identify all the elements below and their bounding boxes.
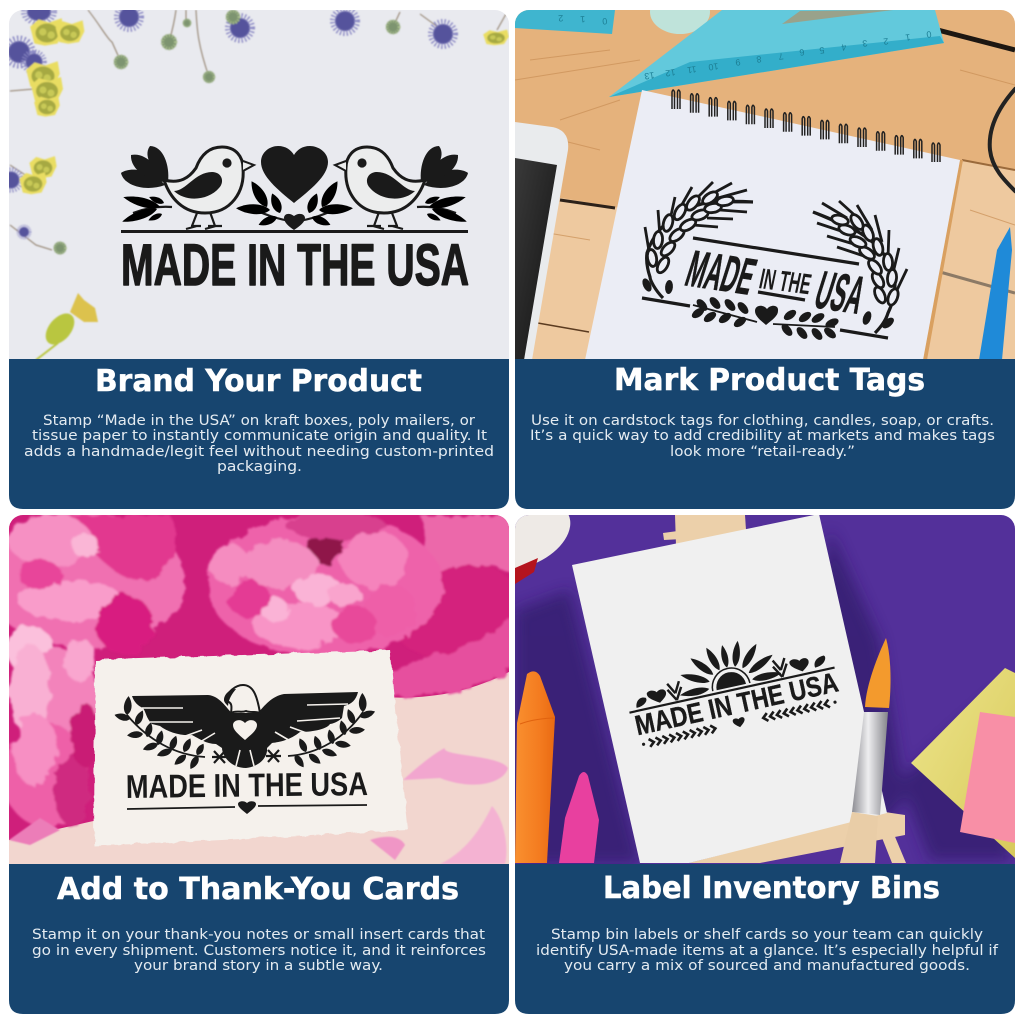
peony blooms [0,511,525,827]
small ruler: 2 [558,13,564,23]
icon: eagle [132,685,358,768]
paintbrush [840,638,891,863]
dried flowers [1,1,509,360]
icon: heart and laurel [690,295,840,342]
stamp text: MADE IN THE USA [632,666,841,741]
icon: right bird [297,146,468,229]
body text: look more “retail-ready.” [670,444,855,460]
triangle ruler: 10 [708,61,719,72]
heading: Mark Product Tags [614,363,925,398]
stamp: eagle [114,685,376,814]
body text: your brand story in a subtle way. [134,958,383,974]
small ruler: 0 [602,16,608,26]
glasses [990,88,1016,192]
caption band [515,864,1015,1014]
triangle ruler: 6 [799,47,805,58]
icons: left ornaments [633,681,684,709]
sponge [911,668,1015,858]
panel: Label Inventory Bins [469,488,1015,1014]
rules and heart [127,801,367,814]
loose petals [9,748,508,864]
triangle ruler: 1 [905,32,911,43]
heading: Add to Thank-You Cards [57,872,459,907]
triangle ruler: 12 [665,67,676,78]
icon: right laurel [288,693,376,769]
triangle ruler: 13 [644,70,655,81]
stamp text: MADE IN THE USA [121,233,469,298]
triangle ruler: 8 [756,54,762,65]
small ruler: 1 [580,14,586,24]
triangle ruler: 7 [778,51,784,62]
body text: Stamp “Made in the USA” on kraft boxes, poly mailers, or [43,413,475,429]
stamp: birds and heart [121,146,469,298]
protractor [650,10,710,34]
body text: packaging. [217,459,302,475]
triangle ruler: 2 [883,36,889,47]
caption band [9,864,509,1014]
plank gaps [515,10,1015,332]
body text: adds a handmade/legit feel without needing custom-printed [24,444,494,460]
white object and red accent [469,488,581,584]
spiral binding [672,90,940,162]
icon: left laurel [114,696,206,771]
body text: tissue paper to instantly communicate origin and quality. It [32,428,488,444]
lighter planks [515,160,1015,360]
purple background [515,515,1015,865]
stamp: wheat wreath: USA [808,260,872,325]
body text: Stamp bin labels or shelf cards so your team can quickly [551,927,983,943]
triangle ruler: 11 [686,64,697,75]
triangle ruler: 5 [819,45,825,56]
icon: small heart [284,214,305,230]
body text: go in every shipment. Customers notice it, and it reinforces [32,943,486,959]
paper background [9,10,509,360]
caption band [9,359,509,509]
triangle ruler: 4 [841,42,847,53]
body text: Use it on cardstock tags for clothing, candles, soap, or crafts. [531,413,994,429]
stamp: wheat wreath [641,182,907,342]
canvas [572,514,887,863]
photo: stamped paper with dried flowers [1,1,509,360]
triangle ruler: 3 [862,38,868,49]
body text [530,413,995,460]
pen [979,227,1012,360]
photo: notebook on wood desk [515,0,1016,360]
handmade paper card [94,650,408,846]
icons: right ornaments [772,649,827,678]
icon: left wheat [641,182,753,298]
caption band [515,359,1015,509]
stamp text: MADE IN THE USA [126,765,368,805]
shadows [515,530,1010,863]
panel: Add to Thank-You Cards [0,511,525,1014]
icon: right wheat [813,201,907,333]
orange crayon [515,671,555,863]
icon: chevron sprigs and heart [641,697,837,749]
body text [32,927,486,974]
body text [536,927,999,974]
body text: you carry a mix of sourced and manufactured goods. [564,958,970,974]
stamp text: in the: IN THE [757,263,814,301]
photo: handmade card with peonies [0,511,525,865]
icon: eagle head [226,685,260,713]
panel: Brand Your Product [1,1,509,509]
small ruler [515,10,615,34]
icon: sun [671,632,782,699]
pink eraser [960,712,1015,843]
stamp: sunrise [619,621,843,750]
rules [642,238,888,338]
pink crayon [559,772,599,863]
phone [515,122,568,360]
icon: asterisks [212,750,281,763]
icon: eagle heart [233,720,257,740]
notebook [585,90,963,360]
body text [24,413,494,475]
body text: Stamp it on your thank-you notes or small insert cards that [32,927,486,943]
triangle ruler: 0 [926,29,932,40]
triangle ruler [609,10,944,97]
heading: Brand Your Product [95,364,422,399]
icon: left bird [121,146,292,229]
photo: mini canvas on easel with art supplies [469,488,1015,865]
heading: Label Inventory Bins [603,871,940,906]
triangle ruler: 9 [735,57,741,68]
wood desk [515,10,1015,360]
easel [663,515,906,863]
panel: Mark Product Tags [515,0,1016,509]
rule [629,666,835,714]
table background [9,515,509,865]
body text: identify USA-made items at a glance. It’s especially helpful if [536,943,999,959]
icon: heart [261,146,328,203]
stamp: wheat wreath: MADE [679,241,762,306]
body text: It’s a quick way to add credibility at markets and makes tags [530,428,995,444]
deep pink backdrop [9,515,509,840]
divider rule [121,230,468,233]
